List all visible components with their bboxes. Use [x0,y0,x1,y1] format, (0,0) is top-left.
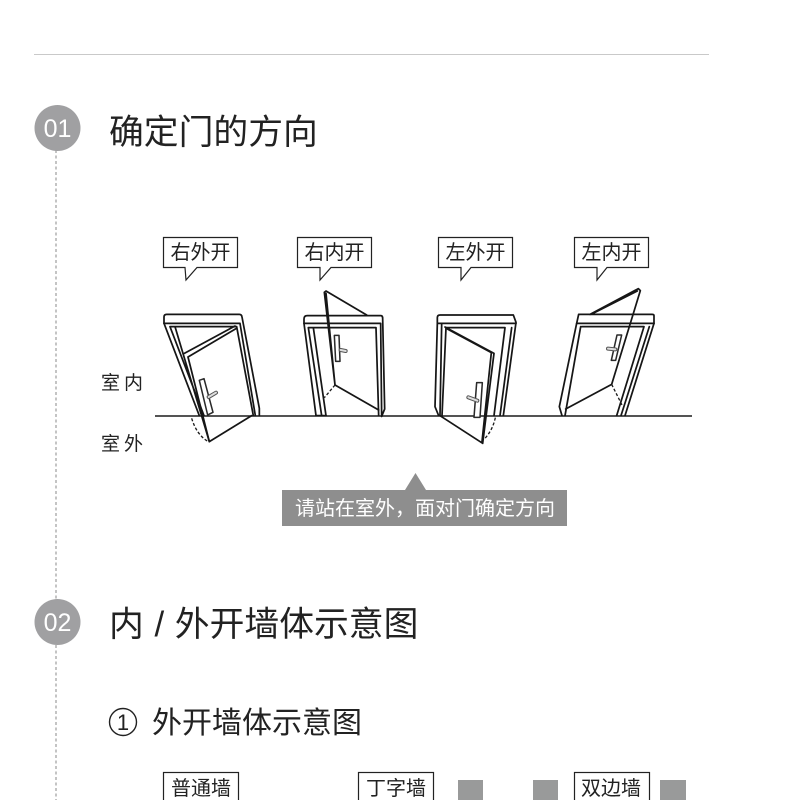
door: opens left outward [435,315,516,443]
speech label: 左内开: 左内开 [582,241,642,264]
subheading: ① 外开墙体示意图: 1 [117,710,129,735]
door: opens left inward [559,289,654,416]
callout: stand outside instruction [282,473,567,526]
wall label: 双边墙 [574,772,650,800]
speech label: 右外开 [164,238,238,280]
heading: 确定门的方向: 确定门的方向 [109,113,318,152]
ground line [155,415,692,417]
heading: 内 / 外开墙体示意图: 内 / 外开墙体示意图 [109,605,418,644]
subheading: ① 外开墙体示意图: 外开墙体示意图 [152,707,362,740]
speech label: 右外开: 右外开 [170,241,230,264]
wall label: 丁字墙: 丁字墙 [366,777,426,800]
section 02 number badge [34,599,80,645]
speech label: 左外开 [438,238,512,280]
door: opens right inward [304,291,385,416]
label: 室内: 室内 [101,372,147,394]
wall label: 双边墙: 双边墙 [581,777,641,800]
section 02 number badge: 02 [44,609,71,637]
speech label: 右内开: 右内开 [304,241,364,264]
section 01 number badge [34,105,80,151]
wall label: 丁字墙 [358,772,434,800]
wall label: 普通墙: 普通墙 [171,777,231,800]
door: opens right outward [164,314,259,442]
speech label: 左内开 [574,238,648,280]
callout: stand outside instruction: 请站在室外，面对门确定方向 [295,497,555,520]
label: 室外: 室外 [101,433,147,455]
section 01 number badge: 01 [44,115,71,143]
speech label: 左外开: 左外开 [446,241,506,264]
wall label: 普通墙 [164,772,238,800]
speech label: 右内开 [298,238,372,280]
wall sample squares [458,780,686,800]
